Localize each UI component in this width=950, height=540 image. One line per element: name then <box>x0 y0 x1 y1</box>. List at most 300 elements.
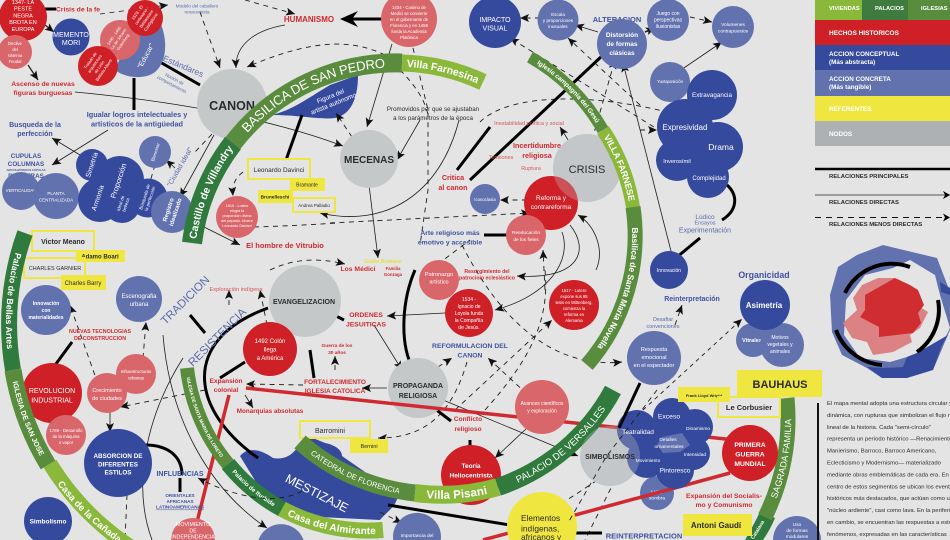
circle: Reforma y contrareforma: Reforma y <box>536 195 566 202</box>
text: Arte religioso: Arte religioso más <box>420 230 480 237</box>
circle: Bienestar: Bienestar <box>150 142 161 162</box>
legend: colour key: IGLESIAS <box>921 6 948 12</box>
box: Antoni Gaudí: Antoni Gaudí <box>691 521 742 530</box>
legend: line types: RELACIONES PRINCIPALES <box>829 174 908 180</box>
circle: Juego con perspectivas: ilusionistas <box>656 24 681 30</box>
text: description paragraph: lineal de la historia. Cada "semi-círculo" <box>827 425 931 431</box>
circle: declive feudal <box>0 35 32 69</box>
circle: Verticalidad: VERTICALIDAD <box>6 188 36 193</box>
circle cluster: Expresividad Drama: Complejidad <box>692 176 726 182</box>
circle: Memento mori <box>52 18 90 56</box>
text: Guerra de los 30 años: Guerra de los <box>322 344 352 349</box>
circle: Motivos vegetales y animales: Motivos <box>771 335 789 341</box>
text: Los Medici: Los Médici <box>340 266 376 273</box>
box: Bauhaus <box>737 370 822 397</box>
text: Nuevas tecnologias: NUEVAS TECNOLOGIAS <box>69 329 131 335</box>
box: Bernini: Bernini <box>360 444 378 450</box>
circle: Escenografia urbana <box>116 276 162 322</box>
band: outer left arc: IGLESIA DE SAN JOSE <box>12 381 44 456</box>
circle cluster: Teatralidad Exceso Pintoresco: ornamentales <box>654 444 684 450</box>
band: lower arc: CATEDRAL DE FLORENCIA <box>312 451 400 494</box>
box: Bernini <box>350 439 388 453</box>
text: Critica al canon: Critica <box>442 173 464 182</box>
legend: line types <box>815 169 950 228</box>
circle: Vitrales: Vitrales <box>742 338 762 344</box>
circle cluster: Expresividad Drama: Inverosímil <box>663 159 691 165</box>
circle: Asimetría <box>740 280 790 330</box>
circle: Primera guerra mundial: GUERRA <box>735 452 765 458</box>
circle: Vitrales <box>736 323 770 357</box>
circle cluster: Expresividad Drama: Extravagancia <box>692 92 732 99</box>
circle: Innovación <box>650 251 688 289</box>
circle: Alberti: arquitectura <box>87 53 103 74</box>
circle: 1534 Ignacio de Loyola <box>445 289 493 337</box>
circle: Teoría Heliocentrista <box>441 445 501 505</box>
circle cluster: Teatralidad Exceso Pintoresco <box>580 398 713 489</box>
circle: Reforma y contrareforma <box>524 134 621 230</box>
circle: Luz y sombra <box>640 476 674 510</box>
box: Andrea Palladio: Andrea Palladio <box>298 203 330 208</box>
circle: Revolucion industrial: REVOLUCION <box>29 388 75 395</box>
circle: Leonardo 1519: del papado. Muere <box>221 219 253 223</box>
circle: Leonardo 1519: elogia la <box>230 209 245 213</box>
text: Monarquias absolutas: Monarquias absolutas <box>237 408 304 415</box>
box: Brunelleschi <box>258 190 293 203</box>
circle: Medici 1434: Florencia y en 1459 <box>390 23 428 28</box>
circle: Uso de formas: modulares <box>786 534 809 540</box>
box: Frank Lloyd Wright: Frank Lloyd Wright <box>686 393 723 398</box>
circle cluster: Teatralidad Exceso Pintoresco: Movimiento <box>636 458 661 464</box>
text: Ruptura: Ruptura <box>521 166 542 172</box>
text: Cupulas columnas pilastras: COLUMNAS <box>8 161 44 168</box>
text: Ascenso burguesas: figuras burguesas <box>14 90 73 97</box>
circle: Avances científicos: y exploración <box>527 408 557 414</box>
box: Adamo Boari <box>76 250 125 262</box>
circle: Reeducación: de los fieles <box>513 237 539 243</box>
text: Reinterpretación: Reinterpretación <box>664 296 720 303</box>
text: Lúdico ensayos experimentación: Lúdico <box>695 214 715 221</box>
circle: Innovación con materialidades <box>21 285 71 335</box>
circle: 1517 Lutero: comienza la <box>563 306 586 311</box>
circle cluster: simetría armonía proporción: Proporción <box>109 162 128 199</box>
text: Arte religioso: emotivo y accesible <box>418 240 482 246</box>
emblem: radial summary diagram <box>830 245 950 378</box>
text: description paragraph <box>817 401 950 540</box>
circle: Escala y proporciones: inusuales <box>548 24 568 29</box>
box: Bramante <box>290 178 325 191</box>
band: outer left arc: Palacio de Bellas Artes <box>6 253 22 349</box>
circle: Medici 1434: en el gobernante de <box>390 17 429 22</box>
text: description paragraph: Eclecticismo y Modernismo— materializado <box>827 460 942 466</box>
blob: Educar <box>115 22 165 77</box>
box: Leonardo Davinci <box>248 159 310 179</box>
circle: Registro idealizado: Registro <box>163 198 176 223</box>
circle: Impacto visual: IMPACTO <box>479 17 511 24</box>
circle: Leonardo 1519: 1519 - Lutero <box>226 204 248 208</box>
node: Canon <box>197 69 267 139</box>
circle: Motivos vegetales y animales: vegetales y <box>767 342 793 348</box>
circle: Primera guerra mundial <box>722 425 778 481</box>
text: Ordenes Jesuiticas: JESUITICAS <box>346 322 386 328</box>
circle: 1347 peste negra: 1347- LA <box>12 0 34 6</box>
circle: Primera guerra mundial: MUNDIAL <box>734 461 766 468</box>
circle: 1769 máquina de vapor: 1769 - Desarrollo <box>50 428 82 433</box>
node: Mecenas: MECENAS <box>344 155 394 166</box>
circle: Medici 1434: Platónica <box>400 35 418 40</box>
circle: 1347 peste negra: PESTE <box>14 7 32 13</box>
blue blob: Mestizaje <box>240 436 398 520</box>
circle: Respuesta emocional: en el espectador <box>634 363 674 369</box>
circle: Motivos vegetales y animales <box>760 323 804 367</box>
text: Exploración indígena: Exploración indígena <box>209 287 263 293</box>
circle: Medici 1434: 1434 - Cosimo de <box>392 5 426 10</box>
text: Expansión colonial: Expansión <box>210 378 242 385</box>
text: description paragraph: Manierismo, Barroco, Barroco Americano, <box>827 449 937 455</box>
circle: Castiglione: 1528 - El <box>130 4 144 21</box>
circle: Innovación: Innovación <box>657 268 681 274</box>
band: right arc: Basilica de Santa Maria Novella <box>597 228 638 349</box>
circle: Patronazgo artístico <box>419 260 459 300</box>
blue blob: Figura del artista autónomo: artista autónomo <box>310 92 358 116</box>
band: right arc: Iglesia campagnia del Gesú <box>537 60 600 123</box>
circle: Movimiento de independencia: MOVIMIENTO <box>176 522 210 528</box>
circle: Uso de formas: Uso <box>793 523 801 528</box>
circle: Registro idealizado <box>151 191 193 233</box>
box: Andrea Palladio <box>293 198 335 212</box>
box: Bramante: Bramante <box>296 182 318 188</box>
text: Lúdico ensayos experimentación: Ensayos <box>694 220 716 226</box>
circle cluster: simetría armonía proporción <box>76 149 168 223</box>
circle: Absorcion de diferentes estilos: DIFERENTES <box>98 461 138 468</box>
text: Estándares: Estándares <box>162 53 205 79</box>
circle: Uso de formas <box>773 516 821 540</box>
circle: Leonardo 1519: Leonardo Davinci <box>222 224 252 228</box>
circle: Innovación con materialidades: con <box>42 308 50 314</box>
circle: Volumenes contrapuestos: Volumenes <box>721 23 745 28</box>
band: top arc: Castillo de Villandry <box>190 146 233 238</box>
circle: Alberti: Battista Alberti <box>94 58 113 82</box>
circle: Reeducación <box>506 215 546 255</box>
text: Nuevas tecnologias: DE CONSTRUCCION <box>74 336 126 342</box>
circle: Juego con perspectivas: perspectivas <box>654 18 683 24</box>
circle: Absorcion de diferentes estilos <box>84 429 152 497</box>
box: Leonardo Davinci: Leonardo Davinci <box>254 167 304 174</box>
text: description paragraph: representa un período histórico —Renacimiento, <box>827 437 950 443</box>
box: Victor Meano <box>32 231 94 251</box>
circle: 1492 Colón: 1492 Colón <box>255 339 285 345</box>
legend: colour key: VIVIENDAS <box>829 6 860 12</box>
circle cluster: Teatralidad Exceso Pintoresco: Teatralidad <box>622 429 654 436</box>
circle: Avances científicos: Avances científicos <box>521 401 563 407</box>
circle: 1517 Lutero: Alemania <box>565 318 583 323</box>
circle: Importancia del: Importancia del <box>401 533 433 539</box>
circle: Gutenberg <box>100 20 140 60</box>
text: Reformulacion del canon: CANON <box>458 352 483 360</box>
text: Orientales africanas latinoamericanas: LATINOAMERICANAS <box>156 505 204 510</box>
circle: 1534 Ignacio de Loyola: Ignacio de <box>457 304 481 310</box>
circle: Luz y sombra: sombra <box>649 496 665 502</box>
circle: Crecimiento de ciudades <box>87 373 127 413</box>
circle: Primera guerra mundial: PRIMERA <box>734 442 766 449</box>
circle: Asimetría: Asimetría <box>746 301 783 310</box>
box: Bauhaus: BAUHAUS <box>752 379 808 391</box>
circle: Impacto visual: VISUAL <box>483 26 508 32</box>
legend: colour key: HECHOS HISTORICOS <box>829 30 900 37</box>
circle: Alberti: Tratado de <box>83 51 98 70</box>
overlay lines across cluster and bands <box>198 383 657 523</box>
node: Propaganda religiosa <box>388 358 448 418</box>
circle cluster: Expresividad Drama: Drama <box>708 142 734 152</box>
red thick lines <box>195 388 735 540</box>
text: Lúdico ensayos experimentación: Experimentación <box>679 228 731 234</box>
text: Busqueda de la perfección: perfección <box>17 131 53 138</box>
connector lines <box>28 0 742 540</box>
circle: Escala y proporciones: Escala <box>551 12 565 17</box>
circle: Medici 1434: Medici se convierte <box>391 11 428 16</box>
legend: colour key: NODOS <box>829 131 852 138</box>
circle: Gutenberg: 1440 - 1450 <box>106 26 122 46</box>
text: Giulio Romano: Giulio Romano <box>364 259 403 265</box>
circle: Castiglione <box>127 0 163 36</box>
band: lower-left arc <box>180 367 384 539</box>
circle: 1347 peste negra <box>0 0 47 41</box>
circle: Volumenes contrapuestos: contrapuestos <box>718 28 749 34</box>
circle: Movimiento de independencia: DE <box>189 528 197 534</box>
circle: Leonardo 1519 <box>216 196 258 238</box>
band: lower-left arc: IGLESIA DE SANTA MARIA DE LORETO <box>186 377 223 457</box>
blue blob: Figura del artista autónomo: Figura del <box>316 88 345 105</box>
circle: Gutenberg: Gutenberg <box>115 33 130 51</box>
node: Evangelizacion <box>269 265 341 337</box>
circle: Leonardo 1519: proporción divina <box>223 214 252 218</box>
text: Expansión colonial: colonial <box>214 387 238 394</box>
band: Sagrada Familia arc <box>745 397 796 540</box>
circle: Escala y proporciones: y proporciones <box>543 18 574 23</box>
circle cluster: Expresividad Drama: Expresividad <box>663 123 707 132</box>
circle: Yuxtaposición <box>650 62 690 102</box>
legend: colour key <box>815 0 950 146</box>
text: Reformulacion del canon: REFORMULACION DEL <box>432 343 508 350</box>
heading: Humanismo: HUMANISMO <box>284 15 334 24</box>
circle: Distorsión de formas clásicas: clásicas <box>609 50 635 57</box>
circle: Alberti <box>78 46 118 86</box>
circle: 1534 Ignacio de Loyola: de Jesús. <box>458 325 480 331</box>
text: Desafiar convenciones: Desafiar <box>653 317 673 323</box>
circle: 1517 Lutero: 1517 - Lutero <box>562 288 586 293</box>
box: Charles Garnier <box>24 258 85 278</box>
circle: Innovación con materialidades: Innovación <box>33 301 59 307</box>
text: Igualar logros: Igualar logros intelectuales y <box>87 110 187 119</box>
text: Orientales africanas latinoamericanas: ORIENTALES <box>165 493 195 498</box>
text: Conflicto religioso: religioso <box>454 426 482 433</box>
text: El hombre de Vitrubio: El hombre de Vitrubio <box>246 241 324 250</box>
circle: Distorsión de formas clásicas: Distorsión <box>606 32 638 39</box>
circle: Elementos indígenas: Elementos <box>521 513 560 523</box>
circle: Iconoclasia: Iconoclasia <box>474 197 496 202</box>
band: Sagrada Familia arc: Catalana <box>751 521 764 539</box>
circle: Absorcion de diferentes estilos: ABSORCION DE <box>94 453 142 460</box>
circle cluster: simetría armonía proporción: belleza <box>121 197 131 212</box>
circle: Memento mori: MORI <box>62 40 80 47</box>
circle cluster: Teatralidad Exceso Pintoresco: Detalles <box>659 438 677 443</box>
circle: Teoría Heliocentrista: Heliocentrista <box>450 472 493 480</box>
circle: Respuesta emocional: emocional <box>641 355 667 361</box>
circle: Simbolismo: Simbolismo <box>30 518 66 526</box>
circle: Revolucion industrial: INDUSTRIAL <box>31 398 73 404</box>
circle cluster: simetría armonía proporción: Búsqueda de <box>138 184 151 210</box>
circle: 1517 Lutero: tesis en Wittenberg, <box>555 300 593 305</box>
heading: Alteracion: ALTERACION <box>593 15 641 24</box>
circle: 1347 peste negra: NEGRA <box>13 13 33 19</box>
circle: Teoría Heliocentrista: Teoría <box>461 463 481 470</box>
band: lower-left arc: Casa del Almirante <box>288 510 376 534</box>
band: lower arc: Villa Pisani <box>426 486 487 499</box>
text: Modelo del caballero: Modelo del caballero <box>176 4 218 8</box>
text: Incertidumbre religiosa: Incertidumbre <box>513 141 561 150</box>
text: Fortalecimiento: IGLESIA CATOLICA <box>305 388 366 395</box>
text: Estándares <box>156 53 205 94</box>
circle: Medici 1434 <box>381 0 437 47</box>
text: description paragraph: fenómenos, expresadas en las características <box>827 532 947 538</box>
band: top arc <box>182 53 486 244</box>
text: Resurgimiento: Resurgimiento del <box>464 269 510 275</box>
band: lower arc <box>294 386 621 504</box>
box: Adamo Boari: Adamo Boari <box>81 254 119 260</box>
text: Familia Gonzaga: Gonzaga <box>384 272 403 277</box>
text: Expansión del Socialismo: mo y Comunismo <box>695 502 753 509</box>
circle: Castiglione: Castiglione <box>143 12 159 32</box>
circle: Patronazgo artístico: artístico <box>429 280 449 286</box>
node label: Simbolismos: SIMBOLISMOS <box>585 454 635 461</box>
legend: colour key: ACCION CONCRETA <box>829 76 891 83</box>
circle: Absorcion de diferentes estilos: ESTILOS <box>105 470 131 477</box>
band: top arc: Villa Farnesina <box>407 60 478 84</box>
text: Tensiones: Tensiones <box>489 155 514 161</box>
circle: Juego con perspectivas: Juego con <box>656 11 680 17</box>
band: outer left arc <box>1 230 134 540</box>
circle cluster: simetría armonía proporción: Simetría <box>85 152 100 179</box>
circle: 1492 Colón <box>243 322 297 376</box>
circle: Revolucion industrial <box>22 363 82 423</box>
circle: Planta centralizada: PLANTA <box>47 191 65 196</box>
circle: Reforma y contrareforma: contrareforma <box>531 204 572 211</box>
text: Igualar logros: artísticos de la antigüedad <box>91 119 183 128</box>
circle: Avances científicos <box>515 380 569 434</box>
box: Barromini: Barromini <box>315 428 345 435</box>
text: description paragraph: El mapa mental adopta una estructura circular y <box>827 401 950 407</box>
circle: Infraestructuras urbanas <box>116 354 156 394</box>
band: right arc: VILLA FARNESE <box>604 134 635 202</box>
circle: Distorsión de formas clásicas <box>597 19 647 69</box>
text: Busqueda de la perfección: Busqueda de la <box>9 122 61 129</box>
circle: Respuesta emocional: Respuesta <box>641 347 667 353</box>
circle: Reeducación: Reeducación <box>512 231 540 236</box>
heading: Crisis de la fe: Crisis de la fe <box>56 6 100 14</box>
circle: Uso de formas: de formas <box>786 528 808 534</box>
text: Influencias: INFLUENCIAS <box>156 471 204 478</box>
box: Barromini <box>300 421 370 438</box>
circle: 1517 Lutero: reforma en <box>564 312 585 317</box>
circle: Infraestructuras urbanas: urbanas <box>128 376 145 380</box>
text: Incertidumbre religiosa: religiosa <box>522 151 553 160</box>
circle: Simbolismo <box>24 497 72 540</box>
node: Canon: CANON <box>209 99 255 113</box>
circle: Motivos vegetales y animales: animales <box>770 349 791 355</box>
circle: 1517 Lutero <box>549 280 599 330</box>
text: Cupulas columnas pilastras: CUPULAS <box>11 153 41 160</box>
node: Crisis <box>553 134 621 202</box>
circle: 1517 Lutero: expone sus 95 <box>560 294 588 299</box>
circle: Crecimiento de ciudades: Crecimiento <box>92 388 122 394</box>
circle: Juego con perspectivas <box>647 0 689 41</box>
text: Tradicion: TRADICION <box>159 274 212 327</box>
circle: Crecimiento de ciudades: de ciudades <box>92 396 122 402</box>
text: Resistencia: RESISTENCIA <box>186 306 249 369</box>
text: description paragraph: históricos más destacados, que actúan como un <box>827 496 950 502</box>
text: Ordenes Jesuiticas: ORDENES <box>349 312 383 319</box>
text: Modelo del caballero: renacentista <box>184 10 210 14</box>
circle: declive feudal: del <box>12 47 18 52</box>
text: Familia Gonzaga: Familia <box>386 266 400 271</box>
band: right arc <box>527 52 643 370</box>
box: Victor Meano: Victor Meano <box>41 239 85 246</box>
box: Antoni Gaudí <box>683 514 752 536</box>
node: Propaganda religiosa: PROPAGANDA <box>393 383 443 390</box>
circle: declive feudal: Declive <box>8 41 22 46</box>
circle: Volumenes contrapuestos <box>712 6 754 48</box>
circle cluster: simetría armonía proporción: Armonía <box>91 184 106 212</box>
circle: Castiglione: cortesano - <box>134 5 150 26</box>
text: Promovidos: a los parámetros de la época <box>393 115 473 122</box>
text: Resurgimiento: patrocinio eclesiástico <box>459 276 515 282</box>
circle: Iconoclasia <box>470 184 500 214</box>
circle: bottom blue node <box>258 524 304 540</box>
box: Charles Barry <box>61 275 106 290</box>
circle: Patronazgo artístico: Patronazgo <box>425 272 453 278</box>
band: Sagrada Familia arc: SAGRADA FAMILIA <box>771 419 792 498</box>
circle: 1492 Colón: llega <box>264 348 277 354</box>
circle: Yuxtaposición: Yuxtaposición <box>657 79 684 84</box>
legend: line types: RELACIONES DIRECTAS <box>829 200 899 206</box>
text: Promovidos: Promovidos por que se ajustaban <box>387 106 479 113</box>
circle cluster: Teatralidad Exceso Pintoresco: Dinamismo <box>686 426 710 432</box>
blue blob: Mestizaje: MESTIZAJE <box>283 472 351 515</box>
box: Le Corbusier: Le Corbusier <box>726 403 772 412</box>
circle: Elementos indígenas: indígenas, <box>521 524 559 534</box>
circle: Planta centralizada <box>33 173 79 219</box>
circle cluster: simetría armonía proporción: Ideal de <box>116 195 125 212</box>
text: Fortalecimiento: FORTALECIMIENTO <box>304 379 366 386</box>
circle: Respuesta emocional <box>627 331 681 385</box>
node label: Crisis: CRISIS <box>569 164 605 176</box>
circle: Bienestar <box>139 136 171 168</box>
circle: 1769 máquina de vapor <box>46 415 86 455</box>
box: Charles Garnier: CHARLES GARNIER <box>29 266 81 272</box>
text: Expansión del Socialismo: Expansión del Socialis- <box>686 493 762 500</box>
box: Charles Barry: Charles Barry <box>65 281 101 287</box>
circle: 1769 máquina de vapor: a vapor <box>59 440 74 445</box>
blue blob: Figura del artista autónomo <box>272 75 358 118</box>
circle: Escala y proporciones <box>538 0 578 40</box>
legend: colour key: (Más abstracta) <box>829 59 875 66</box>
circle cluster: Expresividad Drama <box>656 70 743 198</box>
circle: Movimiento de independencia <box>171 518 215 540</box>
box: Le Corbusier <box>718 397 780 417</box>
circle cluster: simetría armonía proporción: la perfección <box>144 185 156 212</box>
circle: Escenografia urbana: urbana <box>130 302 149 308</box>
circle: 1534 Ignacio de Loyola: Loyola funda <box>455 311 484 317</box>
node: Evangelizacion: EVANGELIZACION <box>273 299 335 306</box>
